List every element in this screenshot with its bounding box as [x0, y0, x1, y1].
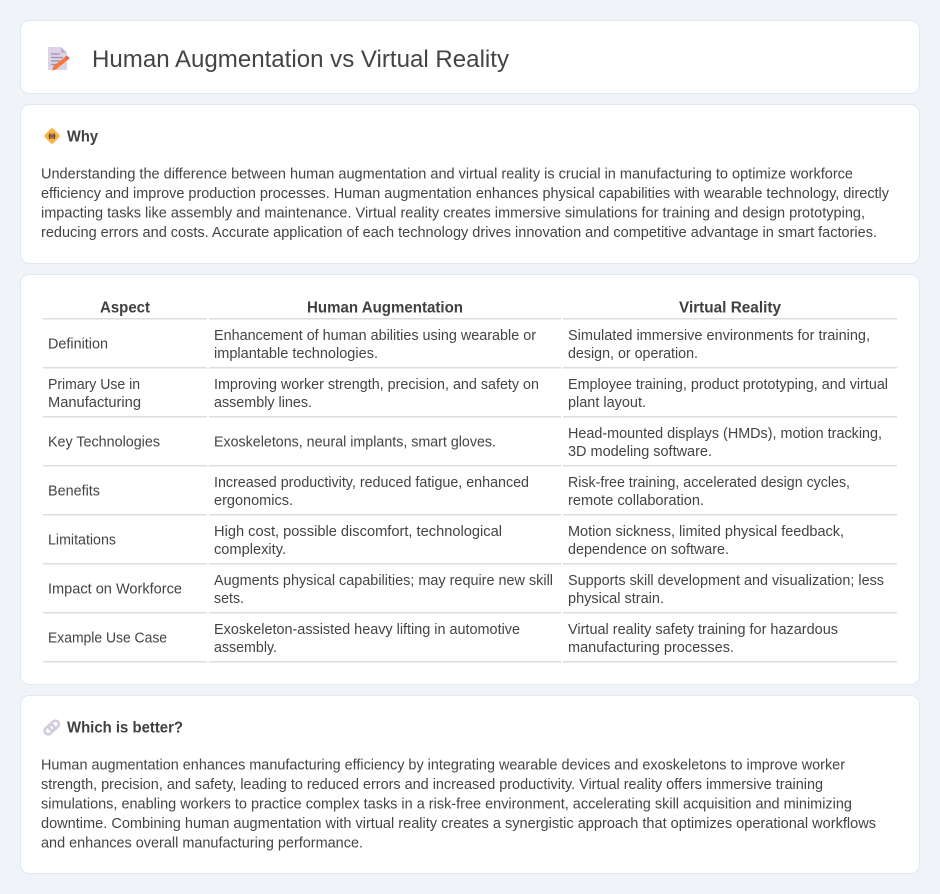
- heading: why: Why: [67, 128, 98, 146]
- table row: limitations: Motion sickness, limited physical feedback,: [568, 524, 844, 540]
- title: Human Augmentation vs Virtual Reality: [92, 46, 509, 73]
- table row: impact on workforce: physical strain.: [568, 591, 664, 607]
- table row: impact on workforce: Supports skill development and visualization; less: [568, 573, 884, 589]
- text block: why paragraph: reducing errors and costs. Accurate application of each technology drives innovation and competitive advantage in smart factories.: [41, 225, 877, 241]
- table row: definition: design, or operation.: [568, 346, 698, 362]
- text block: why paragraph: impacting tasks like assembly and maintenance. Virtual reality creates immersive simulations for training and design prototyping,: [41, 206, 865, 222]
- text block: which is better paragraph: downtime. Combining human augmentation with virtual reality creates a synergistic approach that optimizes operational workflows: [41, 816, 876, 832]
- table row: example use case: Exoskeleton-assisted heavy lifting in automotive: [214, 622, 520, 638]
- table row: definition: [43, 328, 897, 368]
- table row: impact on workforce: [43, 573, 897, 614]
- table row: primary use: Employee training, product prototyping, and virtual: [568, 377, 888, 393]
- table row: primary use: Manufacturing: [48, 395, 141, 411]
- text block: why paragraph: [41, 166, 890, 241]
- table row: impact on workforce: Augments physical capabilities; may require new skill: [214, 573, 553, 589]
- text block: which is better paragraph: [41, 758, 876, 852]
- text block: which is better paragraph: and enhances overall manufacturing performance.: [41, 836, 363, 852]
- text block: why paragraph: Understanding the difference between human augmentation and virtual reality is crucial in manufacturing to optimize workforce: [41, 166, 853, 182]
- text block: which is better paragraph: simulations, enabling workers to practice complex tasks in a risk-free environment, accelerating skill acquisition and minimizing: [41, 796, 852, 812]
- table row: example use case: Example Use Case: [48, 630, 167, 646]
- table row: example use case: [43, 622, 897, 662]
- panel: title header: [20, 20, 920, 94]
- table row: key technologies: Key Technologies: [48, 434, 160, 450]
- table row: benefits: Benefits: [48, 484, 100, 500]
- table row: key technologies: Head-mounted displays (HMDs), motion tracking,: [568, 426, 882, 442]
- table row: key technologies: [43, 426, 897, 466]
- table row: impact on workforce: Impact on Workforce: [48, 582, 182, 598]
- panel: why: [20, 104, 920, 264]
- table row: primary use: plant layout.: [568, 395, 646, 411]
- table row: example use case: assembly.: [214, 640, 277, 656]
- icon: memo with pencil: [48, 47, 70, 70]
- table row: benefits: Risk-free training, accelerated design cycles,: [568, 475, 850, 491]
- table row: primary use: assembly lines.: [214, 395, 312, 411]
- icon: chain link: [43, 719, 60, 736]
- table row: benefits: [43, 475, 897, 516]
- table row: primary use: Primary Use in: [48, 377, 140, 393]
- table row: limitations: High cost, possible discomfort, technological: [214, 524, 502, 540]
- heading: which is better: Which is better?: [67, 720, 183, 736]
- table row: limitations: Limitations: [48, 532, 116, 548]
- text block: why paragraph: efficiency and improve production processes. Human augmentation enhances physical capabilities with wearable technology, directly: [41, 186, 890, 202]
- text block: which is better paragraph: Human augmentation enhances manufacturing efficiency by integrating wearable devices and exoskeletons to improve worker: [41, 758, 845, 774]
- table row: key technologies: Exoskeletons, neural implants, smart gloves.: [214, 434, 496, 450]
- table row: example use case: Virtual reality safety training for hazardous: [568, 622, 838, 638]
- table row: definition: Definition: [48, 336, 108, 352]
- panel: which is better: [20, 696, 920, 874]
- table row: key technologies: 3D modeling software.: [568, 444, 712, 460]
- table row: definition: implantable technologies.: [214, 346, 378, 362]
- table row: limitations: [43, 524, 897, 564]
- table row: limitations: dependence on software.: [568, 542, 729, 558]
- table header row: Aspect: [100, 300, 151, 316]
- icon: warning diamond: [44, 128, 60, 144]
- table header row: [43, 300, 897, 320]
- table row: limitations: complexity.: [214, 542, 286, 558]
- table row: impact on workforce: sets.: [214, 591, 244, 607]
- table row: benefits: remote collaboration.: [568, 493, 704, 509]
- text block: which is better paragraph: strength, precision, and safety, leading to reduced errors and increased productivity. Virtual reality offers immersive training: [41, 777, 823, 793]
- table header row: Virtual Reality: [679, 300, 781, 316]
- table row: definition: Simulated immersive environments for training,: [568, 328, 870, 344]
- table row: benefits: ergonomics.: [214, 493, 293, 509]
- table row: definition: Enhancement of human abilities using wearable or: [214, 328, 536, 344]
- table row: primary use: Improving worker strength, precision, and safety on: [214, 377, 539, 393]
- table header row: Human Augmentation: [307, 300, 463, 316]
- panel: comparison table: [20, 274, 920, 684]
- table row: example use case: manufacturing processes.: [568, 640, 734, 656]
- table row: benefits: Increased productivity, reduced fatigue, enhanced: [214, 475, 529, 491]
- table row: primary use: [43, 377, 897, 418]
